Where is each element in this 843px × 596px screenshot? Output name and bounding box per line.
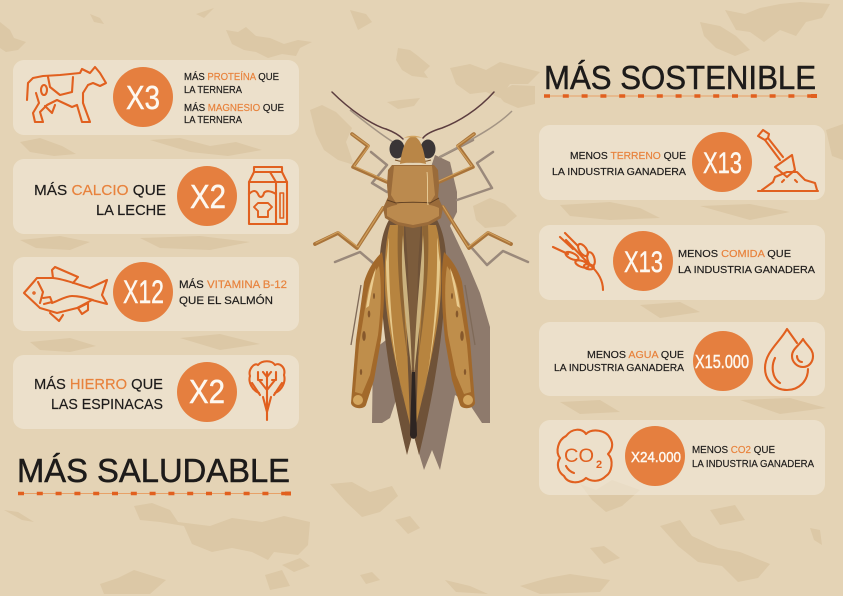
multiplier X3: X3 [126, 79, 160, 116]
grasshopper shadow [335, 110, 528, 470]
text: food: MENOS COMIDA QUE [678, 248, 791, 260]
panel: iron [13, 355, 299, 429]
text: CO2: LA INDUSTRIA GANADERA [692, 458, 814, 470]
text: protein: MÁS PROTEÍNA QUE [184, 70, 279, 83]
text: land: MENOS TERRENO QUE [570, 150, 686, 162]
text: CO2: MENOS CO2 QUE [692, 444, 775, 456]
icon: spinach [249, 361, 285, 420]
text: vitamin B-12: QUE EL SALMÓN [179, 294, 273, 307]
text: magnesium [184, 101, 284, 126]
text: vitamin B-12: MÁS VITAMINA B-12 [179, 278, 287, 291]
text: magnesium: LA TERNERA [184, 115, 242, 126]
icon: CO2 cloud [558, 430, 612, 482]
multiplier X13 [692, 132, 752, 192]
legs [315, 134, 511, 248]
text: water: MENOS AGUA QUE [587, 349, 684, 361]
multiplier X24.000: X24.000 [631, 449, 681, 466]
wings [380, 218, 446, 455]
antennae [332, 92, 494, 139]
panel: water [539, 322, 825, 396]
multiplier X2: X2 [189, 373, 225, 410]
panel: calcium [13, 159, 299, 234]
text: calcium [34, 182, 166, 219]
pronotum [383, 160, 443, 228]
panel: food [539, 225, 825, 300]
multiplier X13: X13 [703, 147, 742, 180]
text: calcium: MÁS CALCIO QUE [34, 182, 166, 199]
icon: wheat [553, 233, 603, 290]
text: land [552, 150, 686, 178]
icon: CO2 cloud: 2 [596, 459, 602, 471]
text: food [678, 248, 815, 276]
multiplier X13 [613, 231, 673, 291]
icon: water drops [765, 329, 813, 390]
text: iron: LAS ESPINACAS [51, 396, 163, 413]
multiplier X13: X13 [624, 246, 663, 279]
illustration: grasshopper [315, 92, 528, 470]
multiplier X12 [113, 262, 173, 322]
icon: fish [24, 267, 107, 321]
heading: más saludable: MÁS SALUDABLE [17, 452, 290, 489]
text: CO2 [692, 444, 814, 470]
text: magnesium: MÁS MAGNESIO QUE [184, 101, 284, 114]
multiplier X2 [177, 362, 237, 422]
icon: shovel and soil [758, 130, 818, 191]
hind femurs [351, 252, 475, 408]
text: iron [34, 376, 163, 413]
multiplier X2: X2 [190, 178, 226, 215]
panel: land [539, 125, 825, 200]
multiplier X2 [177, 166, 237, 226]
hind tibiae [351, 285, 475, 345]
multiplier X15.000: X15.000 [695, 352, 749, 372]
text: water [554, 349, 684, 374]
icon: CO2 cloud: CO [564, 446, 594, 467]
panel: CO2 [539, 420, 825, 495]
text: calcium: LA LECHE [96, 202, 166, 219]
icon: cow [27, 67, 106, 122]
text: water: LA INDUSTRIA GANADERA [554, 362, 684, 374]
multiplier X12: X12 [123, 274, 164, 310]
text: food: LA INDUSTRIA GANADERA [678, 264, 815, 276]
multiplier X24.000 [625, 426, 685, 486]
panel: vitamin B-12 [13, 257, 299, 331]
multiplier X15.000 [693, 331, 753, 391]
text: vitamin B-12 [179, 278, 287, 307]
multiplier X3 [113, 67, 173, 127]
head and eyes [390, 136, 436, 164]
panel: protein and magnesium [13, 60, 299, 135]
icon: milk carton [249, 167, 287, 224]
heading: más sostenible: MÁS SOSTENIBLE [544, 59, 816, 96]
text: protein [184, 70, 279, 96]
text: land: LA INDUSTRIA GANADERA [552, 166, 686, 178]
text: iron: MÁS HIERRO QUE [34, 376, 163, 393]
text: protein: LA TERNERA [184, 85, 242, 96]
